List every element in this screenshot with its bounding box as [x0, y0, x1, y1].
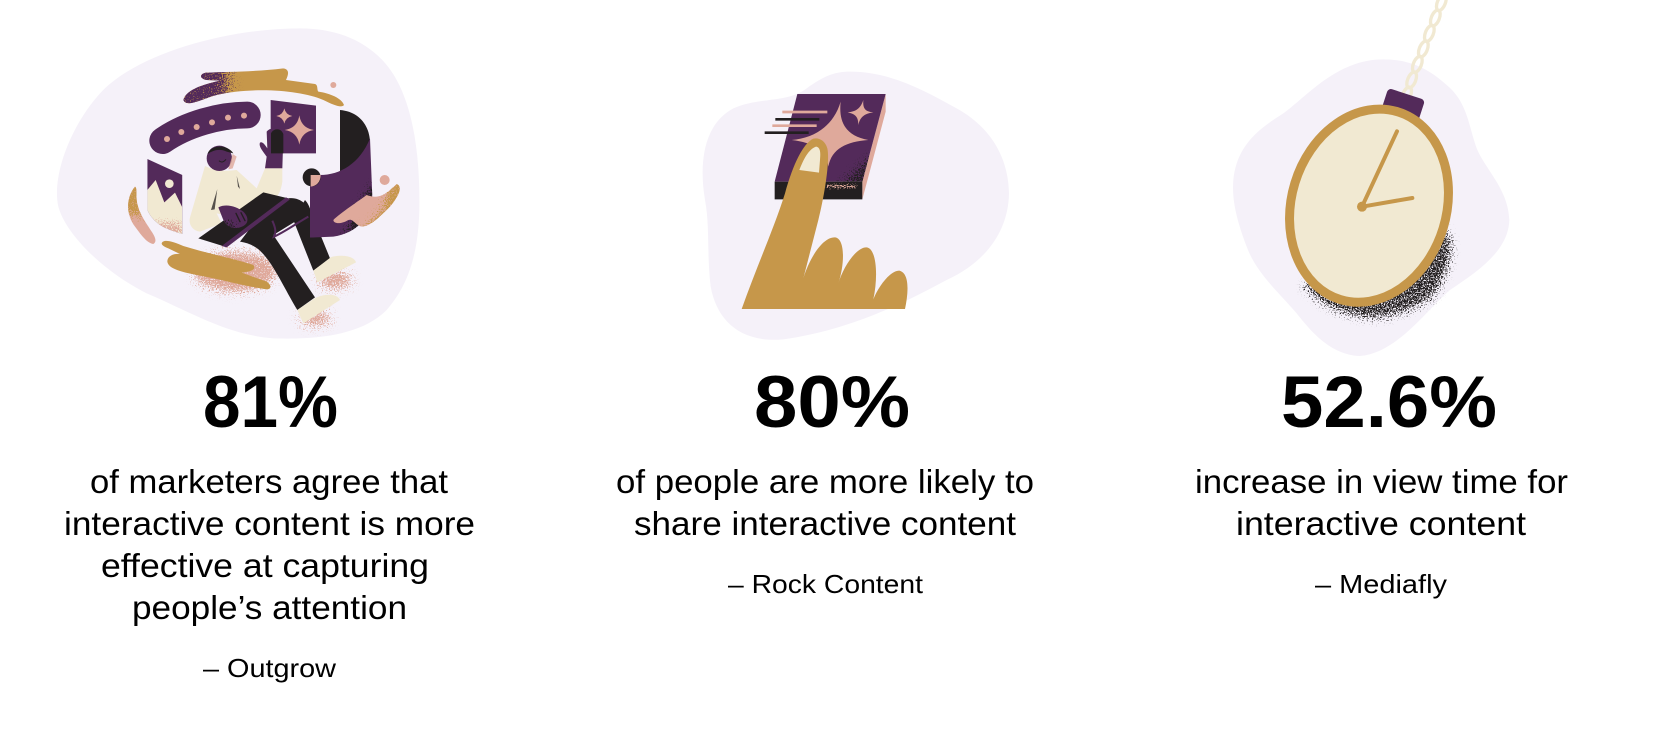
panel: 52.6% view time statistic [1195, 0, 1568, 599]
illustration: finger tapping book [703, 72, 1009, 340]
source: Mediafly: – Mediafly [1315, 569, 1447, 599]
watch body [1266, 89, 1472, 322]
description text: of people are more likely to [616, 463, 1034, 500]
book [773, 93, 887, 199]
small pink dot [330, 82, 336, 88]
pink dot right [380, 175, 390, 185]
description text: interactive content [1236, 505, 1526, 542]
panel: 80% share statistic [616, 72, 1034, 599]
pink speckle under gold stroke [193, 252, 277, 292]
pink and gold hand [333, 184, 400, 226]
background blob [703, 72, 1009, 340]
panel: 81% marketers statistic [57, 28, 475, 683]
background blob [57, 28, 419, 339]
chain [1400, 0, 1448, 104]
description text: of marketers agree that [90, 463, 448, 500]
left gold and pink stroke [128, 186, 156, 244]
small star [848, 100, 873, 125]
big star [792, 102, 868, 167]
foot shadows [298, 271, 352, 326]
fingernail [799, 147, 820, 173]
dotted purple pill [163, 113, 247, 142]
small circle with pink quarter [303, 168, 321, 187]
head [207, 146, 237, 171]
description text: increase in view time for [1195, 463, 1568, 500]
large D shape [310, 110, 372, 238]
description text: effective at capturing [101, 547, 429, 584]
motion lines [765, 112, 827, 133]
crown [1381, 88, 1425, 122]
top gold and purple stroke [183, 68, 344, 106]
lower gold stroke [162, 241, 270, 289]
front leg and thigh [240, 198, 315, 310]
picture card [147, 157, 183, 237]
dark speckle shadow [1303, 232, 1452, 318]
laptop [198, 192, 308, 247]
person shirt [190, 166, 282, 232]
description text: interactive content is more [64, 505, 475, 542]
back leg [293, 200, 330, 271]
description text: people’s attention [132, 589, 407, 626]
hand [742, 138, 908, 309]
description text: share interactive content [634, 505, 1016, 542]
lap hand [218, 206, 248, 228]
raised hand [260, 129, 283, 168]
description text [1195, 463, 1568, 542]
source: Outgrow: – Outgrow [203, 653, 336, 683]
illustration: person with floating content [57, 28, 419, 339]
source: Rock Content: – Rock Content [728, 569, 924, 599]
stat: 81%: 81% [203, 362, 338, 443]
shoes [297, 256, 356, 323]
star card [271, 100, 316, 153]
description text [64, 463, 475, 626]
shirt folds [211, 176, 240, 210]
stat: 52.6%: 52.6% [1281, 362, 1497, 443]
description text [616, 463, 1034, 542]
background blob [1233, 59, 1509, 356]
illustration: pocket watch [1233, 0, 1509, 356]
watch hands [1357, 131, 1412, 212]
stat: 80%: 80% [754, 362, 910, 443]
